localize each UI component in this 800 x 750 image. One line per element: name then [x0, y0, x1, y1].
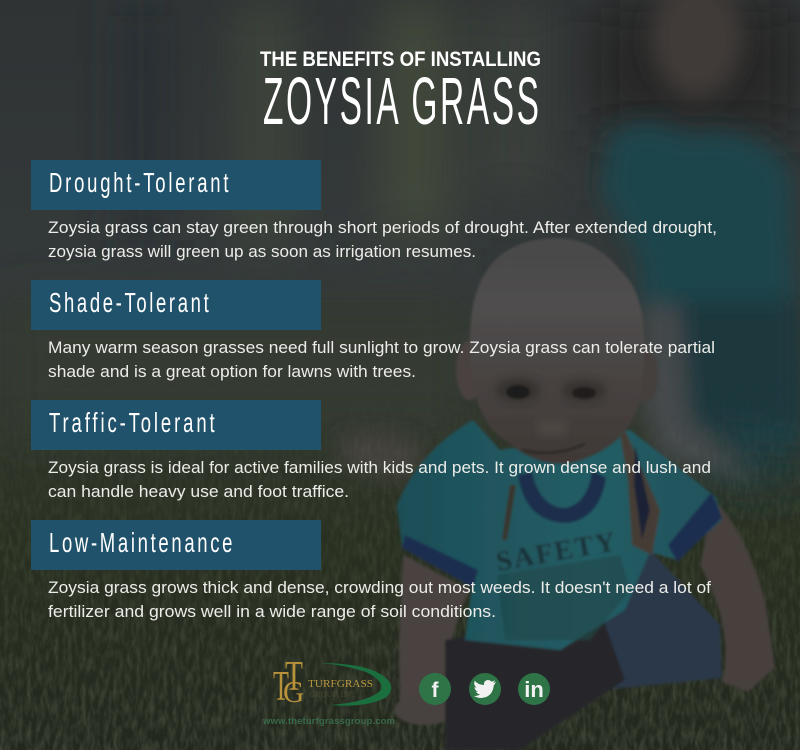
gold monogram: G: [283, 674, 304, 709]
body text: Zoysia grass grows thick and dense, crowding out most weeds. It doesn't need a lot of: [48, 578, 711, 597]
logo: Turfgrass Group: [273, 653, 391, 710]
title line 2: ZOYSIA GRASS: [263, 65, 539, 139]
body text: zoysia grass will green up as soon as irrigation resumes.: [48, 242, 476, 261]
body text: shade and is a great option for lawns with trees.: [48, 362, 416, 381]
green swoosh: [320, 663, 391, 706]
body text: [48, 218, 717, 261]
baby body: [394, 420, 775, 750]
body text: can handle heavy use and foot traffice.: [48, 482, 349, 501]
mouth: [522, 444, 585, 453]
collar: [518, 470, 606, 523]
suspender: [620, 430, 660, 555]
panel: drought-tolerant: [31, 160, 717, 261]
website url: www.theturfgrassgroup.com: [262, 716, 395, 727]
left eye: [506, 385, 530, 399]
heading bar: [31, 520, 321, 570]
blurred woman in background: [340, 0, 800, 480]
heading: Traffic-Tolerant: [49, 408, 215, 439]
body text: [48, 458, 711, 501]
body text: [48, 338, 715, 381]
gold monogram: T: [273, 663, 289, 710]
gold monogram: [273, 653, 304, 710]
body text: fertilizer and grows well in a wide range of soil conditions.: [48, 602, 496, 621]
icon: facebook: f: [432, 679, 440, 702]
icon: twitter: [469, 673, 501, 705]
title: [260, 48, 541, 139]
right eye: [572, 387, 596, 399]
grass texture: [0, 474, 800, 750]
gold monogram: T: [285, 653, 303, 699]
heading: Shade-Tolerant: [49, 288, 209, 319]
panel: low-maintenance: [31, 520, 711, 621]
wordmark second line: GROUP, INC: [309, 690, 355, 699]
panel: traffic-tolerant: [31, 400, 711, 501]
baby head: [456, 238, 658, 464]
left arm: [399, 555, 470, 705]
panel: shade-tolerant: [31, 280, 715, 381]
icon: facebook: [419, 673, 451, 705]
heading: Drought-Tolerant: [49, 168, 229, 199]
icon: linkedin: in: [524, 677, 544, 702]
blurred garden background: [0, 0, 800, 480]
head: [470, 238, 644, 464]
shirt lettering: SAFETY: [494, 526, 620, 578]
heading bar: [31, 400, 321, 450]
dark belly: [445, 610, 625, 750]
shorts: [450, 550, 722, 750]
hand: [394, 695, 456, 725]
icon: linkedin: [518, 673, 550, 705]
body text: Zoysia grass can stay green through short periods of drought. After extended drought,: [48, 218, 717, 237]
right arm: [700, 500, 775, 692]
body text: [48, 578, 711, 621]
ears: [456, 340, 484, 400]
heading bar: [31, 160, 321, 210]
body text: Zoysia grass is ideal for active families with kids and pets. It grown dense and lush and: [48, 458, 711, 477]
shirt print: [497, 555, 630, 640]
title line 1: THE BENEFITS OF INSTALLING: [260, 48, 541, 71]
heading bar: [31, 280, 321, 330]
nose: [536, 420, 568, 436]
sleeve bands: [402, 535, 478, 588]
eye sockets: [496, 378, 606, 402]
heading: Low-Maintenance: [49, 528, 232, 559]
wordmark: TURFGRASS: [308, 678, 373, 690]
body text: Many warm season grasses need full sunlight to grow. Zoysia grass can tolerate partial: [48, 338, 715, 357]
t-shirt: [397, 420, 722, 650]
